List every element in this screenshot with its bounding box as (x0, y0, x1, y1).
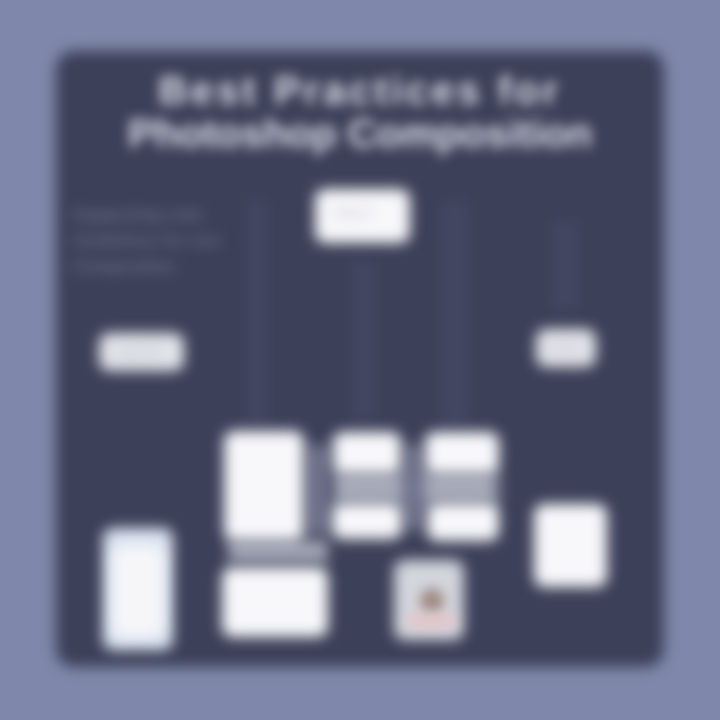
box: grid lower right (427, 503, 499, 541)
icon: portrait card (384, 550, 474, 650)
title (122, 68, 598, 162)
text block: intro notes: Supporting note (72, 205, 203, 224)
box: top node (315, 189, 410, 243)
box: left node: Layout (113, 343, 162, 360)
title: Best Practices for (158, 69, 562, 113)
box: tall centre card (224, 431, 304, 541)
box: grid upper right (425, 432, 499, 474)
box: lower-left tall card (92, 518, 184, 660)
box: top node: Start (333, 203, 372, 222)
title: Photoshop Composition (128, 112, 592, 156)
box: right card (534, 504, 607, 587)
text block: intro notes: Guidelines for use (72, 231, 220, 250)
text block: intro notes (72, 205, 220, 276)
text block: intro notes: Composition (72, 257, 176, 276)
box: right node (536, 329, 596, 367)
panel: main dark card (56, 51, 664, 667)
box: grid lower left (332, 503, 402, 539)
box: left node (99, 333, 184, 371)
box: lower wide card (222, 567, 328, 637)
box: right node: Color (546, 340, 583, 356)
box: grid upper left (333, 432, 401, 474)
